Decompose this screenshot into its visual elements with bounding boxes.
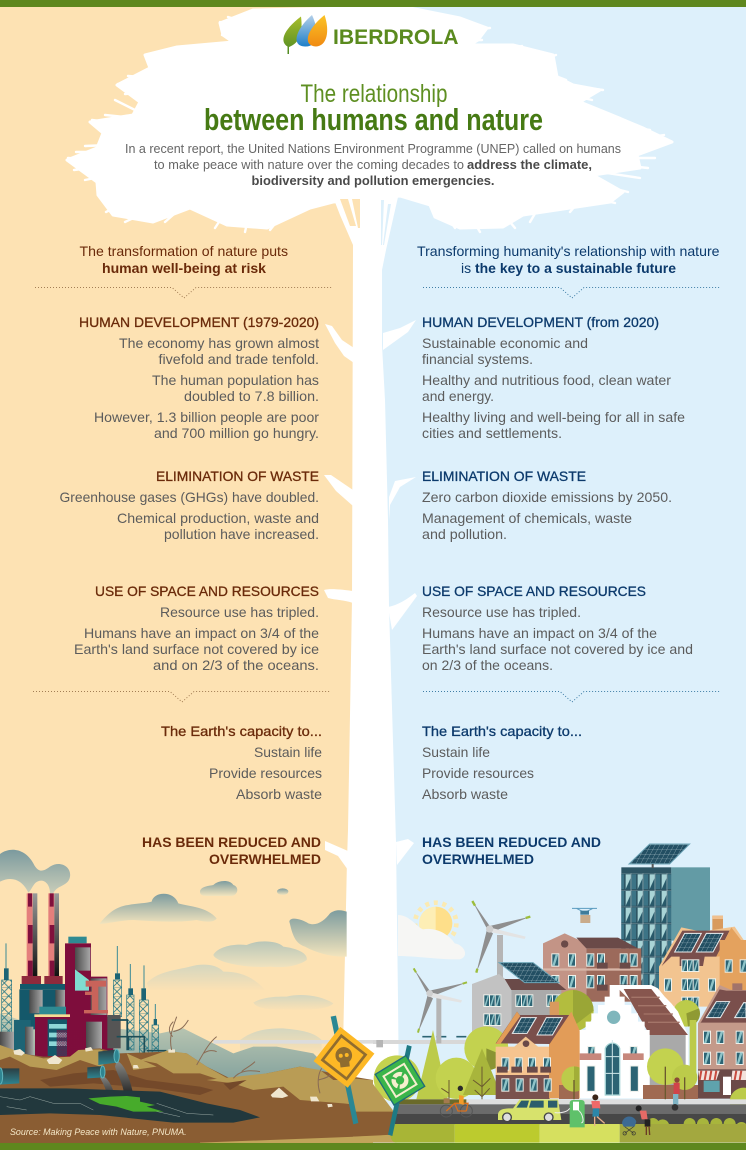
intro text: to make peace with nature over the coming decades to xyxy=(154,157,464,172)
right conclusion: OVERWHELMED xyxy=(422,851,534,867)
icon: three leaves and drops xyxy=(283,15,327,54)
source note: Source: Making Peace with Nature, PNUMA. xyxy=(10,1127,187,1137)
left section: earth's capacity: Absorb waste xyxy=(236,786,322,802)
right section: use of space and resources: Resource use has tripled. xyxy=(422,604,581,620)
electric car xyxy=(498,1099,561,1122)
right section: earth's capacity: Absorb waste xyxy=(422,786,508,802)
left section: human development: fivefold and trade tenfold. xyxy=(158,351,319,367)
left section: earth's capacity: The Earth's capacity to... xyxy=(161,723,322,739)
left conclusion: OVERWHELMED xyxy=(209,851,321,867)
cyclist xyxy=(440,1086,472,1117)
right section: human development: and energy. xyxy=(422,388,494,404)
left section: earth's capacity: Sustain life xyxy=(254,744,322,760)
left section: use of space and resources: Humans have an impact on 3/4 of the xyxy=(84,625,319,641)
brick apartments: back xyxy=(543,933,641,1002)
charging point xyxy=(555,1100,585,1127)
right section: elimination of waste: Zero carbon dioxide emissions by 2050. xyxy=(422,489,672,505)
left section: human development: The human population has xyxy=(152,372,319,388)
left section: use of space and resources: Resource use has tripled. xyxy=(160,604,319,620)
glass tower xyxy=(621,844,710,991)
divider: right top xyxy=(423,288,720,298)
right section: human development: Sustainable economic and xyxy=(422,335,588,351)
recycling sign xyxy=(368,1048,432,1112)
right section: human development: financial systems. xyxy=(422,351,533,367)
divider: left lower xyxy=(33,692,330,702)
logo: Iberdrola xyxy=(283,15,458,54)
rocks xyxy=(13,1047,333,1107)
right section: earth's capacity xyxy=(422,723,582,802)
left section: human development: doubled to 7.8 billion. xyxy=(184,388,319,404)
right column heading: the key to a sustainable future xyxy=(475,260,676,276)
right column heading: is xyxy=(461,260,471,276)
left section: human development: and 700 million go hungry. xyxy=(154,425,319,441)
horizon rail xyxy=(213,1040,373,1044)
drone xyxy=(572,908,597,923)
warning sign: toxic skull xyxy=(310,1016,378,1124)
left column heading xyxy=(80,243,288,276)
left section: elimination of waste: pollution have increased. xyxy=(164,526,319,542)
pipework xyxy=(112,1020,166,1067)
left section: earth's capacity xyxy=(161,723,322,802)
tree silhouette xyxy=(67,8,672,1100)
left section: elimination of waste xyxy=(60,468,319,542)
parent with pram xyxy=(622,1105,650,1135)
intro text xyxy=(125,141,621,188)
left section: elimination of waste: Greenhouse gases (GHGs) have doubled. xyxy=(60,489,319,505)
front orange house xyxy=(496,1002,587,1099)
right section: elimination of waste: ELIMINATION OF WASTE xyxy=(422,468,586,484)
chimneys xyxy=(22,893,63,985)
left column heading: human well-being at risk xyxy=(102,260,266,276)
top green bar xyxy=(0,0,746,7)
left column heading: The transformation of nature puts xyxy=(80,243,288,259)
title xyxy=(204,80,543,137)
clouds xyxy=(99,881,347,1053)
mountains xyxy=(0,1013,347,1087)
left section: elimination of waste: ELIMINATION OF WASTE xyxy=(156,468,319,484)
wind turbine: large xyxy=(472,901,530,982)
river cracks xyxy=(0,1097,213,1117)
icon: skull xyxy=(334,1046,353,1068)
right section: earth's capacity: The Earth's capacity to... xyxy=(422,723,582,739)
intro text: biodiversity and pollution emergencies. xyxy=(252,173,494,188)
illustration: sustainable city xyxy=(353,844,746,1143)
polluted ground xyxy=(0,1045,373,1143)
right section: human development: HUMAN DEVELOPMENT (from 2020) xyxy=(422,314,659,330)
left conclusion: HAS BEEN REDUCED AND xyxy=(142,834,321,850)
toxic slime xyxy=(88,1096,163,1112)
polluted river xyxy=(0,1088,260,1123)
dead trees xyxy=(169,1017,333,1093)
right section: elimination of waste: Management of chemicals, waste xyxy=(422,510,632,526)
right section: human development: Healthy living and well-being for all in safe xyxy=(422,409,685,425)
bottom green bar xyxy=(0,1143,746,1150)
pink corner building xyxy=(698,983,746,1099)
left section: use of space and resources: and on 2/3 of the oceans. xyxy=(153,657,319,673)
segway rider xyxy=(672,1077,680,1111)
right column heading: Transforming humanity's relationship with nature xyxy=(417,243,720,259)
right column heading xyxy=(417,243,720,276)
hill edge beside the road xyxy=(353,1078,396,1143)
factory xyxy=(0,893,166,1068)
left section: elimination of waste: Chemical production, waste and xyxy=(117,510,319,526)
right section: elimination of waste: and pollution. xyxy=(422,526,507,542)
divider: right lower xyxy=(423,692,720,702)
street xyxy=(395,1099,746,1124)
title: between humans and nature xyxy=(204,102,543,137)
left section: use of space and resources: Earth's land surface not covered by ice xyxy=(74,641,319,657)
grey building xyxy=(472,963,566,1043)
left section: use of space and resources: USE OF SPACE AND RESOURCES xyxy=(95,583,319,599)
right section: use of space and resources: Earth's land surface not covered by ice and xyxy=(422,641,693,657)
left conclusion xyxy=(142,834,321,867)
right section: elimination of waste xyxy=(422,468,672,542)
intro text: In a recent report, the United Nations Environment Programme (UNEP) called on humans xyxy=(125,141,621,156)
background trees xyxy=(374,990,700,1102)
rail line xyxy=(373,1037,473,1047)
pedestrian on phone xyxy=(591,1094,605,1126)
lattice towers xyxy=(2,943,159,1068)
right conclusion xyxy=(422,834,601,867)
waste pipes xyxy=(0,1049,133,1097)
factory buildings xyxy=(0,937,121,1058)
right section: human development xyxy=(422,314,685,441)
right section: human development: Healthy and nutritious food, clean water xyxy=(422,372,671,388)
white stepped-gable church xyxy=(580,985,688,1098)
left section: human development: The economy has grown almost xyxy=(119,335,319,351)
left section: human development: HUMAN DEVELOPMENT (1979-2020) xyxy=(79,314,319,330)
intro text: address the climate, xyxy=(467,157,592,172)
right section: use of space and resources: Humans have an impact on 3/4 of the xyxy=(422,625,657,641)
tree trunk and branches xyxy=(324,197,417,1100)
peach townhouses xyxy=(659,916,746,1009)
left section: earth's capacity: Provide resources xyxy=(209,765,322,781)
sun and cloud xyxy=(398,903,465,959)
right section: use of space and resources: on 2/3 of the oceans. xyxy=(422,657,553,673)
left section: use of space and resources xyxy=(74,583,319,673)
illustration: polluted landscape xyxy=(0,850,373,1143)
sign post: recycling xyxy=(368,1045,432,1136)
smoke from chimneys xyxy=(0,850,70,893)
right section: use of space and resources xyxy=(422,583,693,673)
left section: human development xyxy=(79,314,319,441)
right section: human development: cities and settlements. xyxy=(422,425,562,441)
wind turbine: small xyxy=(414,968,467,1043)
right section: use of space and resources: USE OF SPACE AND RESOURCES xyxy=(422,583,646,599)
tree crown xyxy=(67,8,672,232)
right conclusion: HAS BEEN REDUCED AND xyxy=(422,834,601,850)
front trees and fence xyxy=(643,1048,746,1116)
grass strips xyxy=(390,1118,746,1143)
right section: earth's capacity: Provide resources xyxy=(422,765,534,781)
wordmark: IBERDROLA xyxy=(333,26,458,49)
left section: human development: However, 1.3 billion people are poor xyxy=(94,409,319,425)
right section: earth's capacity: Sustain life xyxy=(422,744,490,760)
divider: left top xyxy=(35,288,332,298)
title: The relationship xyxy=(300,80,448,108)
